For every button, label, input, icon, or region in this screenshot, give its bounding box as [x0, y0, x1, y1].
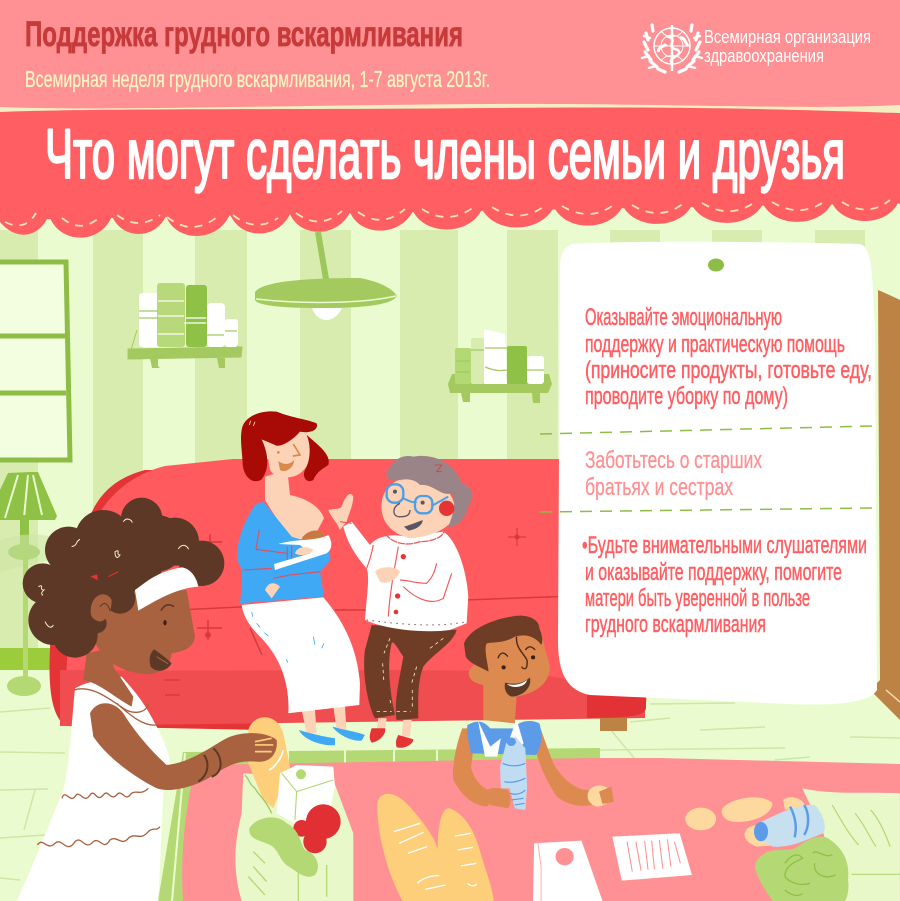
milk carton — [277, 765, 335, 827]
scallops — [0, 190, 900, 238]
right shelf with books — [448, 329, 552, 403]
divider two — [540, 508, 872, 512]
card text: first item: проводите уборку по дому) — [585, 383, 788, 410]
card — [558, 242, 877, 704]
dress — [17, 677, 170, 901]
card text: third item: грудного вскармливания — [585, 611, 766, 638]
biscuit and fist — [588, 786, 611, 807]
left shelf with books — [128, 283, 242, 368]
mother breastfeeding — [237, 411, 365, 745]
headband — [135, 567, 198, 611]
grandmother — [328, 456, 472, 748]
glasses — [403, 497, 448, 505]
paper bag — [533, 841, 603, 901]
ear — [91, 594, 112, 622]
chest and neck — [265, 470, 324, 540]
sofa back and seat — [66, 459, 646, 722]
card text: first item — [585, 304, 872, 410]
door — [870, 290, 900, 720]
shirt — [343, 522, 468, 631]
bag body — [235, 773, 353, 901]
head — [381, 476, 455, 538]
trousers — [364, 625, 457, 720]
card text: second item — [585, 447, 762, 501]
receipt — [612, 833, 692, 881]
face — [90, 590, 195, 674]
leaves — [249, 817, 318, 877]
sofa front band — [60, 670, 645, 726]
WHO name: здравоохранения — [704, 46, 824, 66]
neck — [83, 647, 133, 707]
bottle — [500, 737, 527, 810]
nose and mouth — [394, 503, 410, 517]
window — [0, 262, 70, 460]
baby and arm — [302, 530, 325, 543]
hair — [386, 456, 472, 527]
woman with groceries — [17, 498, 277, 901]
woman with groceries: grocery bag — [235, 717, 353, 901]
skirt — [242, 597, 360, 713]
card text: second item: братьях и сестрах — [585, 474, 733, 501]
hair curls — [38, 519, 189, 627]
legs and shoes — [302, 707, 347, 733]
hair — [23, 498, 224, 658]
hand raised — [328, 494, 353, 530]
mouth — [505, 677, 530, 697]
room background — [0, 230, 900, 901]
card text: second item: Заботьтесь о старших — [585, 447, 762, 474]
biscuits — [685, 808, 716, 830]
baguette — [248, 717, 290, 808]
header title: Поддержка грудного вскармливания — [25, 15, 463, 54]
card text: first item: Оказывайте эмоциональную — [585, 304, 782, 331]
hair — [241, 411, 329, 481]
mouth — [278, 460, 294, 471]
pin — [708, 258, 724, 272]
hand over bottle — [487, 788, 510, 808]
lace hem — [367, 620, 467, 625]
sofa left arm — [50, 470, 260, 730]
green vegetable — [755, 837, 848, 901]
header subtitle: Всемирная неделя грудного вскармливания, 1-7 августа 2013г. — [25, 66, 490, 92]
header band — [0, 0, 900, 112]
sofa — [50, 459, 646, 731]
stitching — [5, 200, 890, 227]
head and neck — [469, 633, 550, 723]
collar — [385, 530, 445, 544]
bracelets — [198, 748, 221, 782]
mouth — [150, 649, 172, 671]
WHO logo — [642, 25, 702, 72]
arm — [90, 703, 277, 790]
water bottle on rug — [757, 805, 825, 847]
eye and brow — [161, 605, 174, 611]
ceiling lamp — [255, 232, 397, 320]
baguettes — [377, 794, 494, 901]
blue top — [237, 502, 331, 603]
right green bag — [802, 788, 900, 901]
hair — [464, 616, 542, 672]
rug items — [377, 788, 900, 901]
WHO name — [704, 27, 871, 66]
shoes — [377, 718, 412, 737]
sofa leg — [600, 718, 627, 731]
table lamp and stand — [0, 472, 58, 696]
radish — [293, 804, 341, 853]
shirt — [467, 721, 542, 755]
cheek — [439, 501, 454, 516]
awning — [0, 107, 900, 238]
boy — [453, 616, 614, 810]
arms — [453, 728, 595, 807]
rug — [158, 748, 900, 901]
card text: third item — [582, 532, 867, 638]
face — [262, 432, 311, 477]
divider one — [540, 426, 872, 434]
